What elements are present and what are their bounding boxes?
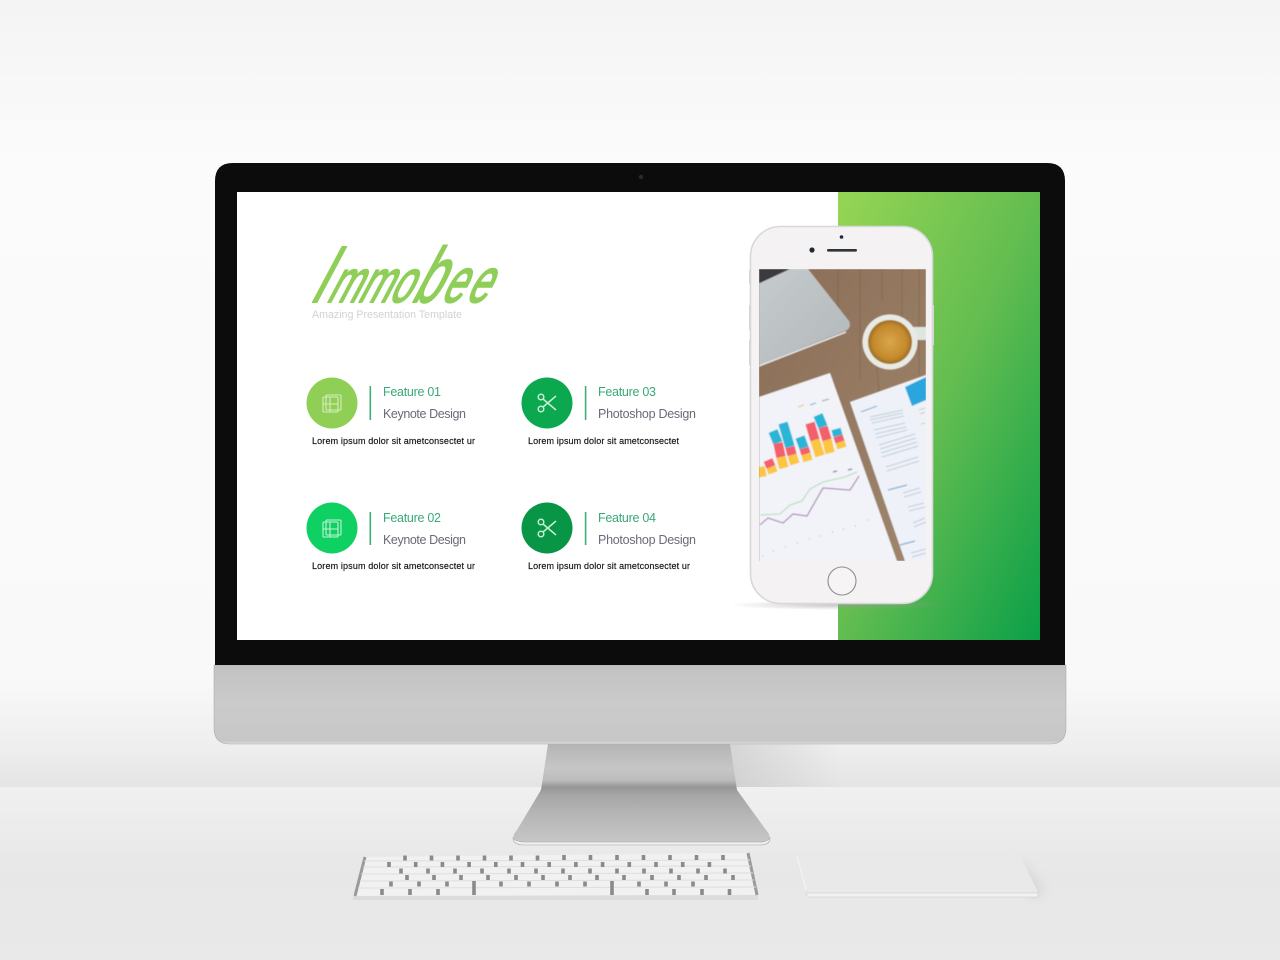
coffee cup <box>910 327 926 340</box>
shadow behind stand <box>730 744 840 787</box>
phone home button <box>828 567 856 595</box>
phone body <box>750 226 932 604</box>
phone speaker <box>827 249 857 252</box>
monitor stand <box>513 744 770 845</box>
title: Immobee: mmo <box>318 247 437 315</box>
monitor chin <box>214 665 1066 744</box>
trackpad shadow <box>1019 856 1044 897</box>
icon: layers <box>306 502 358 554</box>
slide screen <box>237 192 1040 640</box>
feature 04 subheading: Photoshop Design <box>598 533 696 547</box>
feature 04 <box>522 502 696 571</box>
keyboard side edges <box>355 853 757 896</box>
icon: scissors <box>522 378 572 428</box>
feature 01 description: Lorem ipsum dolor sit ametconsectet ur <box>312 436 475 446</box>
keyboard key gaps <box>382 855 733 895</box>
feature 02 <box>306 502 475 571</box>
right report paper <box>850 375 926 561</box>
bar chart <box>760 415 842 477</box>
smartphone <box>750 226 934 604</box>
feature 02 description: Lorem ipsum dolor sit ametconsectet ur <box>312 561 475 571</box>
title: Immobee: b <box>400 233 473 320</box>
chart legend <box>798 405 804 407</box>
keyboard row gaps <box>358 860 756 888</box>
phone side buttons <box>750 270 934 365</box>
title: Immobee <box>299 231 523 320</box>
line chart <box>760 469 868 556</box>
subtitle: Amazing Presentation Template <box>312 309 462 321</box>
phone camera <box>809 247 815 253</box>
feature 03 subheading: Photoshop Design <box>598 407 696 421</box>
desk surface <box>0 787 1280 960</box>
feature 01 <box>306 378 475 446</box>
feature 01 subheading: Keynote Design <box>383 407 466 421</box>
left report paper <box>759 373 897 561</box>
phone photo: desk with reports <box>759 269 926 561</box>
feature 03 heading: Feature 03 <box>598 385 656 399</box>
wood desk <box>759 269 926 561</box>
icon: layers <box>306 378 358 428</box>
monitor bezel <box>215 163 1065 665</box>
title: Immobee: I <box>299 231 360 320</box>
monitor <box>214 163 1066 744</box>
keyboard <box>353 853 758 900</box>
phone shadow <box>728 600 952 610</box>
trackpad <box>797 853 1044 897</box>
laptop <box>759 269 850 365</box>
feature 03 description: Lorem ipsum dolor sit ametconsectet <box>528 436 679 446</box>
camera <box>639 175 643 179</box>
feature 02 heading: Feature 02 <box>383 511 441 525</box>
report text lines <box>870 408 926 557</box>
feature 02 subheading: Keynote Design <box>383 533 466 547</box>
title: Immobee: e <box>457 246 515 315</box>
icon: scissors <box>522 502 572 554</box>
feature 01 heading: Feature 01 <box>383 385 441 399</box>
report headings <box>861 406 915 545</box>
title: Immobee: e <box>432 246 491 315</box>
keyboard base <box>353 853 758 900</box>
blue label <box>905 377 926 406</box>
green side panel <box>838 192 1040 640</box>
feature 04 heading: Feature 04 <box>598 511 656 525</box>
phone sensor <box>840 235 843 239</box>
feature 04 description: Lorem ipsum dolor sit ametconsectet ur <box>528 561 690 571</box>
screen left edge <box>759 269 760 561</box>
feature 03 <box>522 378 696 446</box>
